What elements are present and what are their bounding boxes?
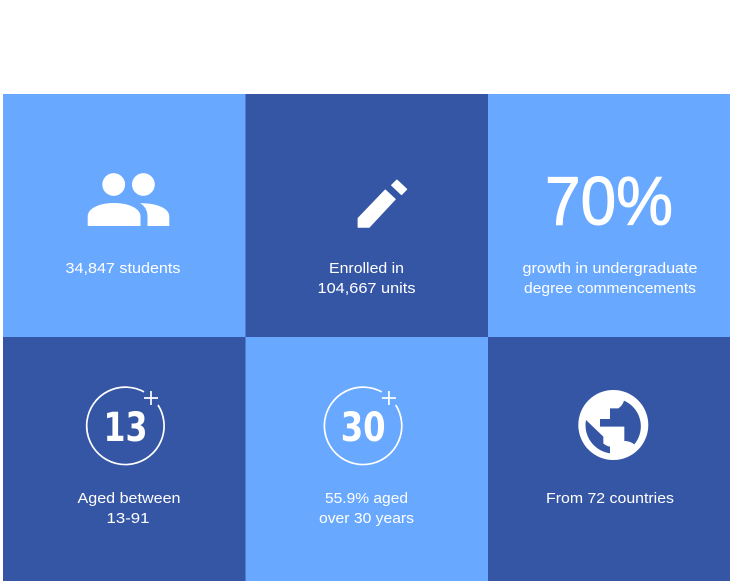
panel: age range (3, 337, 246, 581)
panel: over 30 (246, 337, 488, 581)
icon: people (88, 173, 169, 226)
icon: 13 plus (87, 387, 164, 465)
text: students: 34,847 students (66, 260, 180, 277)
icon: 30 plus (324, 387, 402, 465)
text: unit count: 104,667 units (318, 280, 416, 297)
panel: countries (488, 337, 730, 581)
icon: pencil (358, 180, 406, 227)
text: over 30 years: over 30 years (319, 510, 414, 527)
icon: 13 plus: 13 (104, 405, 148, 451)
panel: students (3, 94, 246, 337)
icon: 30 plus: 30 (341, 405, 386, 451)
text: units: Enrolled in (329, 260, 404, 277)
panel: growth (488, 94, 730, 337)
text: age range: Aged between (78, 490, 180, 507)
panel: units (246, 94, 488, 337)
big number: 70%: 70% (545, 162, 673, 240)
text: growth: growth in undergraduate (522, 260, 698, 277)
text: countries: From 72 countries (546, 490, 674, 507)
text: age values: 13-91 (106, 510, 150, 527)
text: percent aged: 55.9% aged (325, 490, 408, 507)
icon: globe (578, 390, 648, 460)
text: commencements: degree commencements (524, 280, 696, 297)
